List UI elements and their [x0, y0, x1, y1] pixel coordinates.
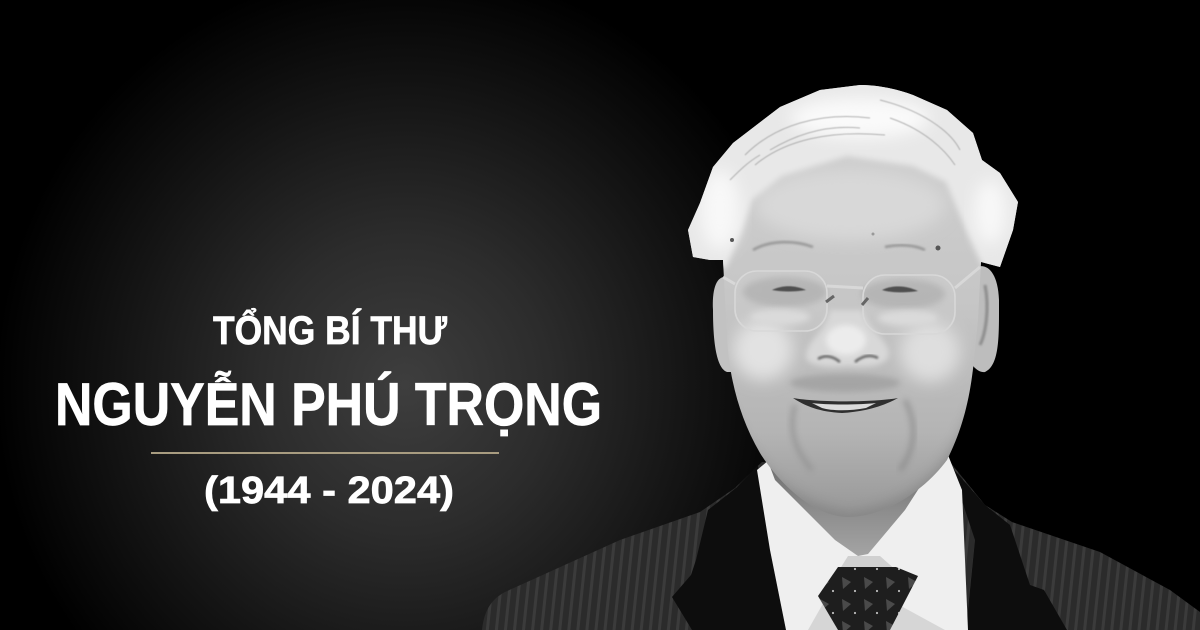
eye: right	[882, 286, 918, 292]
gold divider line	[151, 452, 499, 454]
cheek highlights	[733, 320, 793, 380]
eyebrows	[753, 242, 813, 250]
shirt shading	[808, 600, 945, 630]
jacket lapel: right	[950, 465, 1067, 630]
hair strands	[730, 100, 960, 180]
under-eye highlight	[750, 309, 810, 325]
eye: left	[772, 286, 806, 292]
nose	[806, 310, 889, 367]
ears	[713, 266, 999, 372]
text: life years: (1944 - 2024)	[204, 470, 454, 512]
hair mass	[688, 85, 1018, 270]
heading: Tổng Bí Thư: TỔNG BÍ THƯ	[213, 306, 448, 353]
portrait	[482, 70, 1200, 630]
head: face and hair	[688, 85, 1018, 509]
upper lip shade	[790, 374, 900, 392]
jacket lapel: left	[672, 465, 788, 630]
smile folds	[792, 405, 812, 470]
lower face shadow	[772, 420, 962, 517]
neck	[760, 440, 950, 556]
forehead tone	[760, 174, 940, 238]
tie	[818, 567, 918, 630]
heading: name: NGUYỄN PHÚ TRỌNG	[55, 371, 602, 438]
right eyebrow	[885, 245, 925, 250]
mouth	[793, 398, 898, 413]
hair highlights	[790, 98, 930, 138]
shirt collar	[757, 455, 968, 630]
moles	[730, 232, 940, 250]
eye socket shading	[743, 277, 827, 307]
jacket	[482, 462, 1200, 630]
collar knot	[838, 556, 898, 572]
glasses	[723, 267, 980, 334]
face base	[680, 80, 1025, 520]
